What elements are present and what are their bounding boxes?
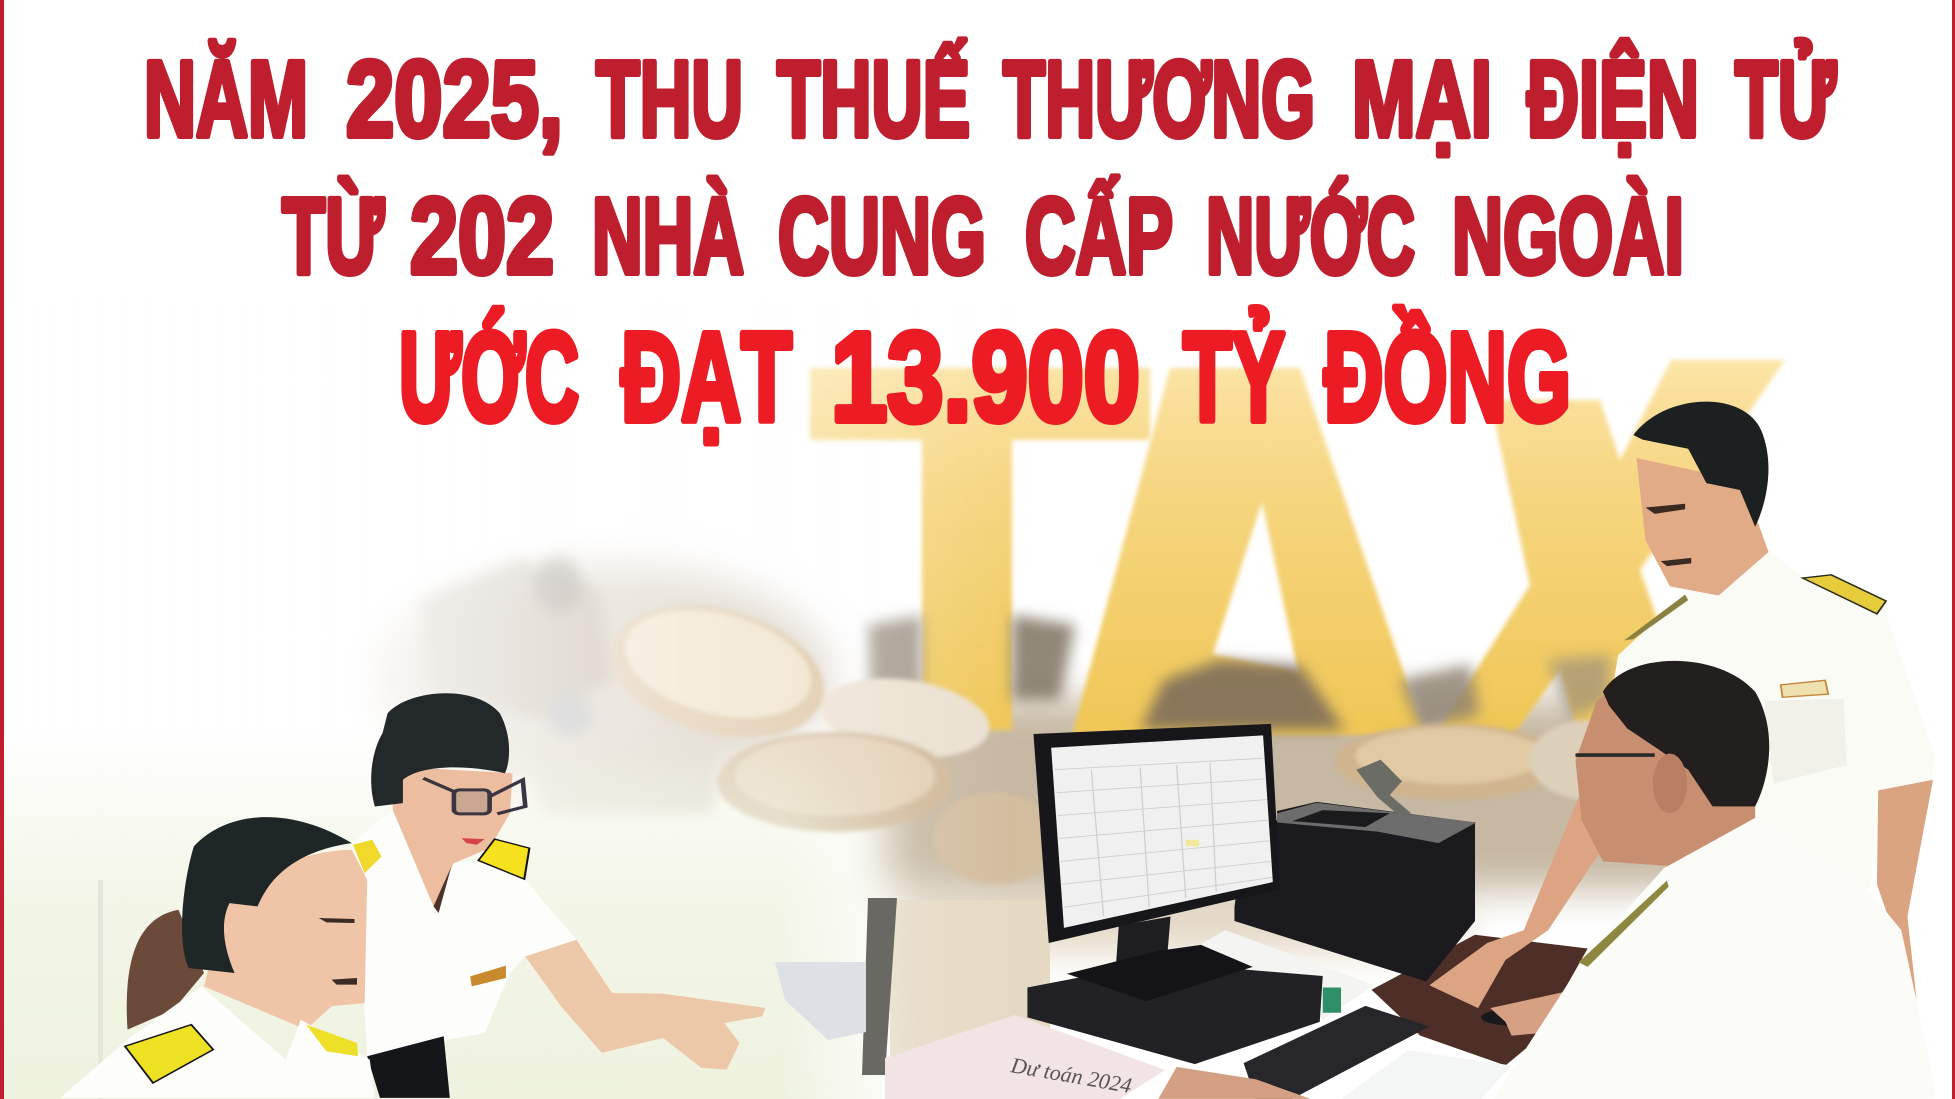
epaulette right — [1803, 575, 1886, 614]
title line 3 — [399, 306, 1571, 448]
back woman — [352, 693, 765, 1098]
left border — [0, 0, 4, 1099]
dark coin piles behind letters — [868, 615, 1610, 730]
title line 2 — [282, 175, 1684, 296]
wall edge line — [98, 880, 103, 1099]
title line 2: NGOÀI — [1452, 175, 1684, 296]
desk — [1371, 935, 1588, 1065]
epaulette left — [1624, 595, 1688, 640]
lips — [462, 838, 484, 845]
stacked papers — [775, 962, 866, 1040]
face and neck — [204, 850, 367, 1030]
title line 1 — [144, 38, 1836, 159]
ponytail — [127, 910, 204, 1030]
title line 1: NĂM — [144, 38, 308, 159]
bottom-left tint — [4, 770, 885, 1099]
shirt — [352, 810, 576, 1056]
other hand — [1158, 1067, 1311, 1099]
left coin stacks — [420, 557, 715, 815]
handwritten label: Dư toán 2024 — [1008, 1052, 1134, 1098]
neck and face — [393, 767, 513, 906]
epaulette left — [353, 840, 381, 873]
title line 3: TỶ — [1183, 306, 1285, 448]
eyes and mouth — [1646, 504, 1691, 566]
mouse — [1481, 1009, 1542, 1026]
epaulette right — [306, 1025, 358, 1056]
printer top — [1277, 803, 1476, 843]
title line 2: NHÀ — [592, 175, 744, 296]
collar shadow — [434, 866, 451, 913]
papers behind monitor — [1201, 930, 1375, 1020]
spreadsheet rows — [1055, 758, 1272, 916]
seated man — [1158, 661, 1935, 1099]
hair — [1633, 402, 1768, 527]
stand base — [1067, 945, 1253, 1001]
trousers — [367, 1036, 450, 1098]
photo: desk and two male officers — [1027, 402, 1935, 1099]
neck and face — [1576, 692, 1755, 866]
glasses — [423, 778, 525, 814]
title line 1: ĐIỆN — [1527, 38, 1699, 159]
binder — [862, 898, 897, 1075]
title line 1: THUẾ — [777, 38, 970, 159]
title line 2: CUNG — [778, 175, 986, 296]
computer tower — [1027, 962, 1323, 1064]
photo: two female tax officers — [60, 693, 765, 1098]
face — [1636, 458, 1769, 595]
title line 1: TỬ — [1735, 38, 1836, 159]
epaulette right — [478, 839, 529, 879]
stand — [1116, 916, 1171, 969]
hair — [371, 693, 509, 806]
cream panel behind desk — [890, 900, 1050, 1099]
monitor — [1033, 724, 1280, 1001]
coin piles — [370, 565, 1760, 950]
document sheet — [1341, 1050, 1512, 1099]
coins — [598, 586, 1650, 884]
letter X — [1432, 360, 1785, 740]
epaulette left — [125, 1025, 213, 1083]
title line 3: ĐẠT — [621, 306, 792, 448]
pocket line — [1764, 699, 1847, 783]
printer — [1234, 760, 1476, 982]
title line 1: THƯƠNG — [1003, 38, 1315, 159]
badge — [1781, 680, 1828, 697]
title line 2: TỪ — [282, 175, 384, 296]
highlight cell — [1186, 840, 1199, 846]
hand on mouse — [1490, 992, 1563, 1036]
standing man — [1429, 402, 1935, 1008]
title line 1: 2025, — [346, 38, 563, 159]
shirt — [1493, 818, 1935, 1099]
front woman — [60, 817, 375, 1098]
green box — [1323, 988, 1341, 1013]
left fade — [0, 300, 1955, 1099]
printer body — [1234, 802, 1475, 982]
hair — [182, 817, 352, 973]
skin arm pointing — [525, 940, 765, 1070]
card terminal — [1356, 760, 1411, 816]
title line 2: CẤP — [1025, 175, 1173, 296]
eye and mouth — [319, 918, 357, 985]
title line 1: MẠI — [1352, 38, 1492, 159]
letter A — [1072, 368, 1425, 735]
title — [144, 38, 1836, 448]
ear — [1653, 754, 1687, 813]
shirt — [1609, 552, 1935, 889]
title line 3: 13.900 — [831, 306, 1140, 448]
background photo: TAX letters and coins — [0, 300, 1955, 1099]
arm left — [1429, 797, 1600, 1008]
frame — [1033, 724, 1280, 943]
tray — [1292, 810, 1390, 827]
arm right — [1877, 780, 1933, 999]
letter T — [810, 368, 1150, 730]
title line 2: 202 — [410, 175, 554, 296]
hair — [1603, 661, 1769, 806]
notebook cover — [885, 1015, 1165, 1099]
epaulette — [1579, 881, 1669, 967]
desk clutter: file stack — [775, 898, 1165, 1099]
glasses — [1576, 751, 1655, 759]
title line 1: THU — [596, 38, 743, 159]
title line 2: NƯỚC — [1206, 175, 1415, 296]
screen — [1051, 735, 1273, 928]
name badge — [470, 966, 506, 986]
keyboard — [1244, 1006, 1429, 1099]
title line 3: ĐỒNG — [1324, 306, 1571, 448]
right border — [1952, 0, 1955, 1099]
title line 3: ƯỚC — [399, 306, 579, 448]
shirt — [60, 986, 375, 1098]
